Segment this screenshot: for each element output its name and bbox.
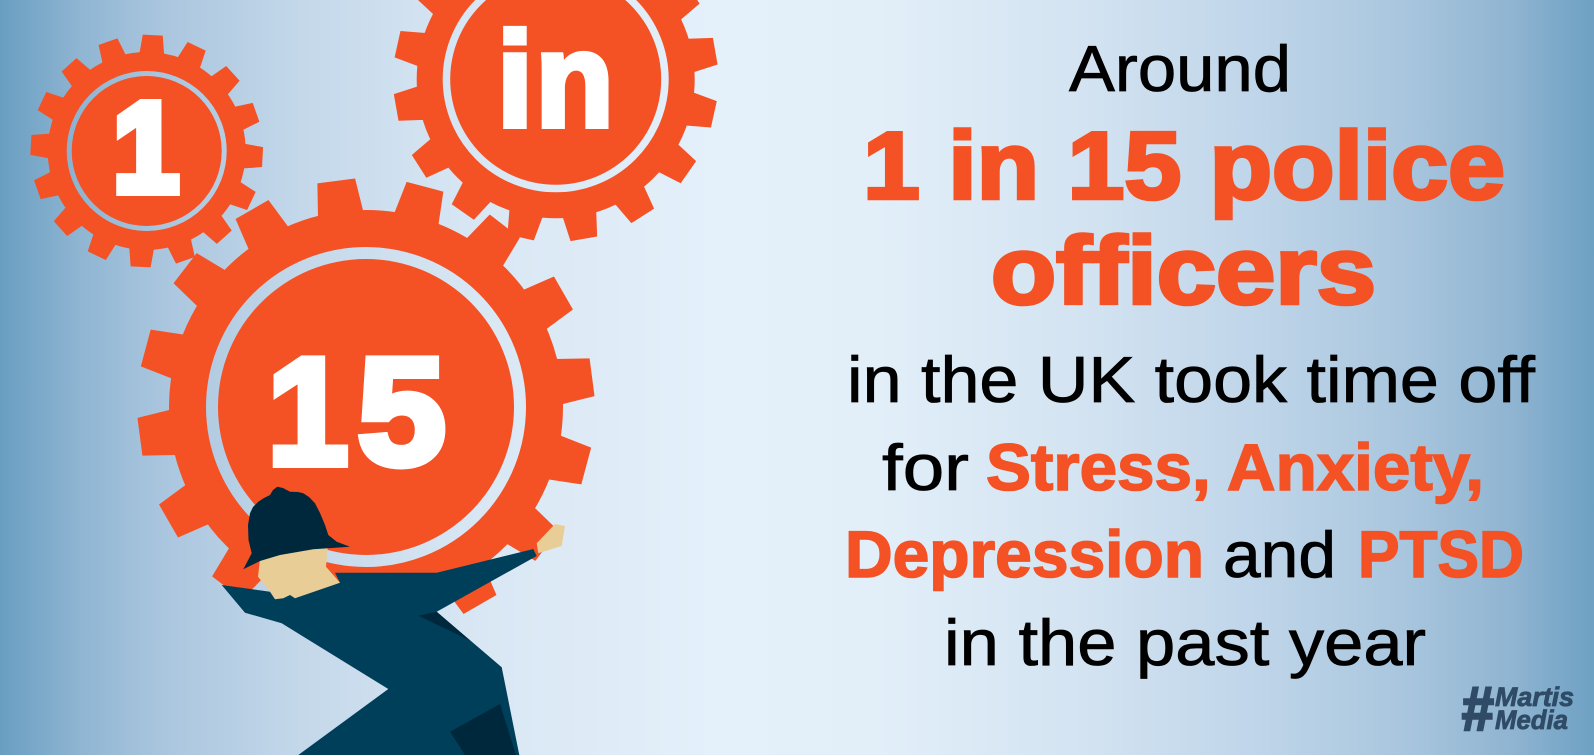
word: in <box>497 6 614 155</box>
text: in the past year: in the past year <box>944 606 1426 679</box>
text: Depression and PTSD: and <box>1223 518 1336 591</box>
word: in: n <box>536 6 614 155</box>
logo: #MartisMedia <box>1461 675 1574 744</box>
figure: police officer carrying the gears <box>222 487 565 755</box>
logo: #MartisMedia: Martis <box>1495 682 1574 712</box>
number: 1: 1 <box>114 77 178 218</box>
word: in: i <box>497 6 533 155</box>
logo: #MartisMedia: Media <box>1495 705 1568 735</box>
officer body and uniform <box>222 549 537 755</box>
text: Depression and PTSD: PTSD <box>1358 517 1524 591</box>
rear leg shadow <box>450 704 516 755</box>
gear: 15 <box>137 178 595 636</box>
text: Depression and PTSD: Depression <box>845 517 1204 591</box>
text: Depression and PTSD <box>845 517 1524 591</box>
number: 15: 5 <box>358 327 446 497</box>
face <box>258 542 340 599</box>
text: in the UK took time off: in the UK took time off <box>847 343 1536 416</box>
heading: 1 in 15 police: 1 in 15 police <box>863 112 1505 220</box>
number: 15: 1 <box>267 327 348 497</box>
helmet <box>243 487 350 569</box>
text: Around: Around <box>1069 32 1291 105</box>
gear: 1 <box>30 35 263 267</box>
hand <box>537 524 565 553</box>
gear: in <box>393 0 718 242</box>
text: for Stress, Anxiety,: Stress, Anxiety, <box>986 430 1484 504</box>
arm shadow <box>418 612 470 640</box>
heading: officers: officers <box>991 218 1376 324</box>
logo: #MartisMedia: # <box>1461 675 1493 744</box>
text: for Stress, Anxiety,: for <box>882 431 969 504</box>
number: 15 <box>267 327 446 497</box>
